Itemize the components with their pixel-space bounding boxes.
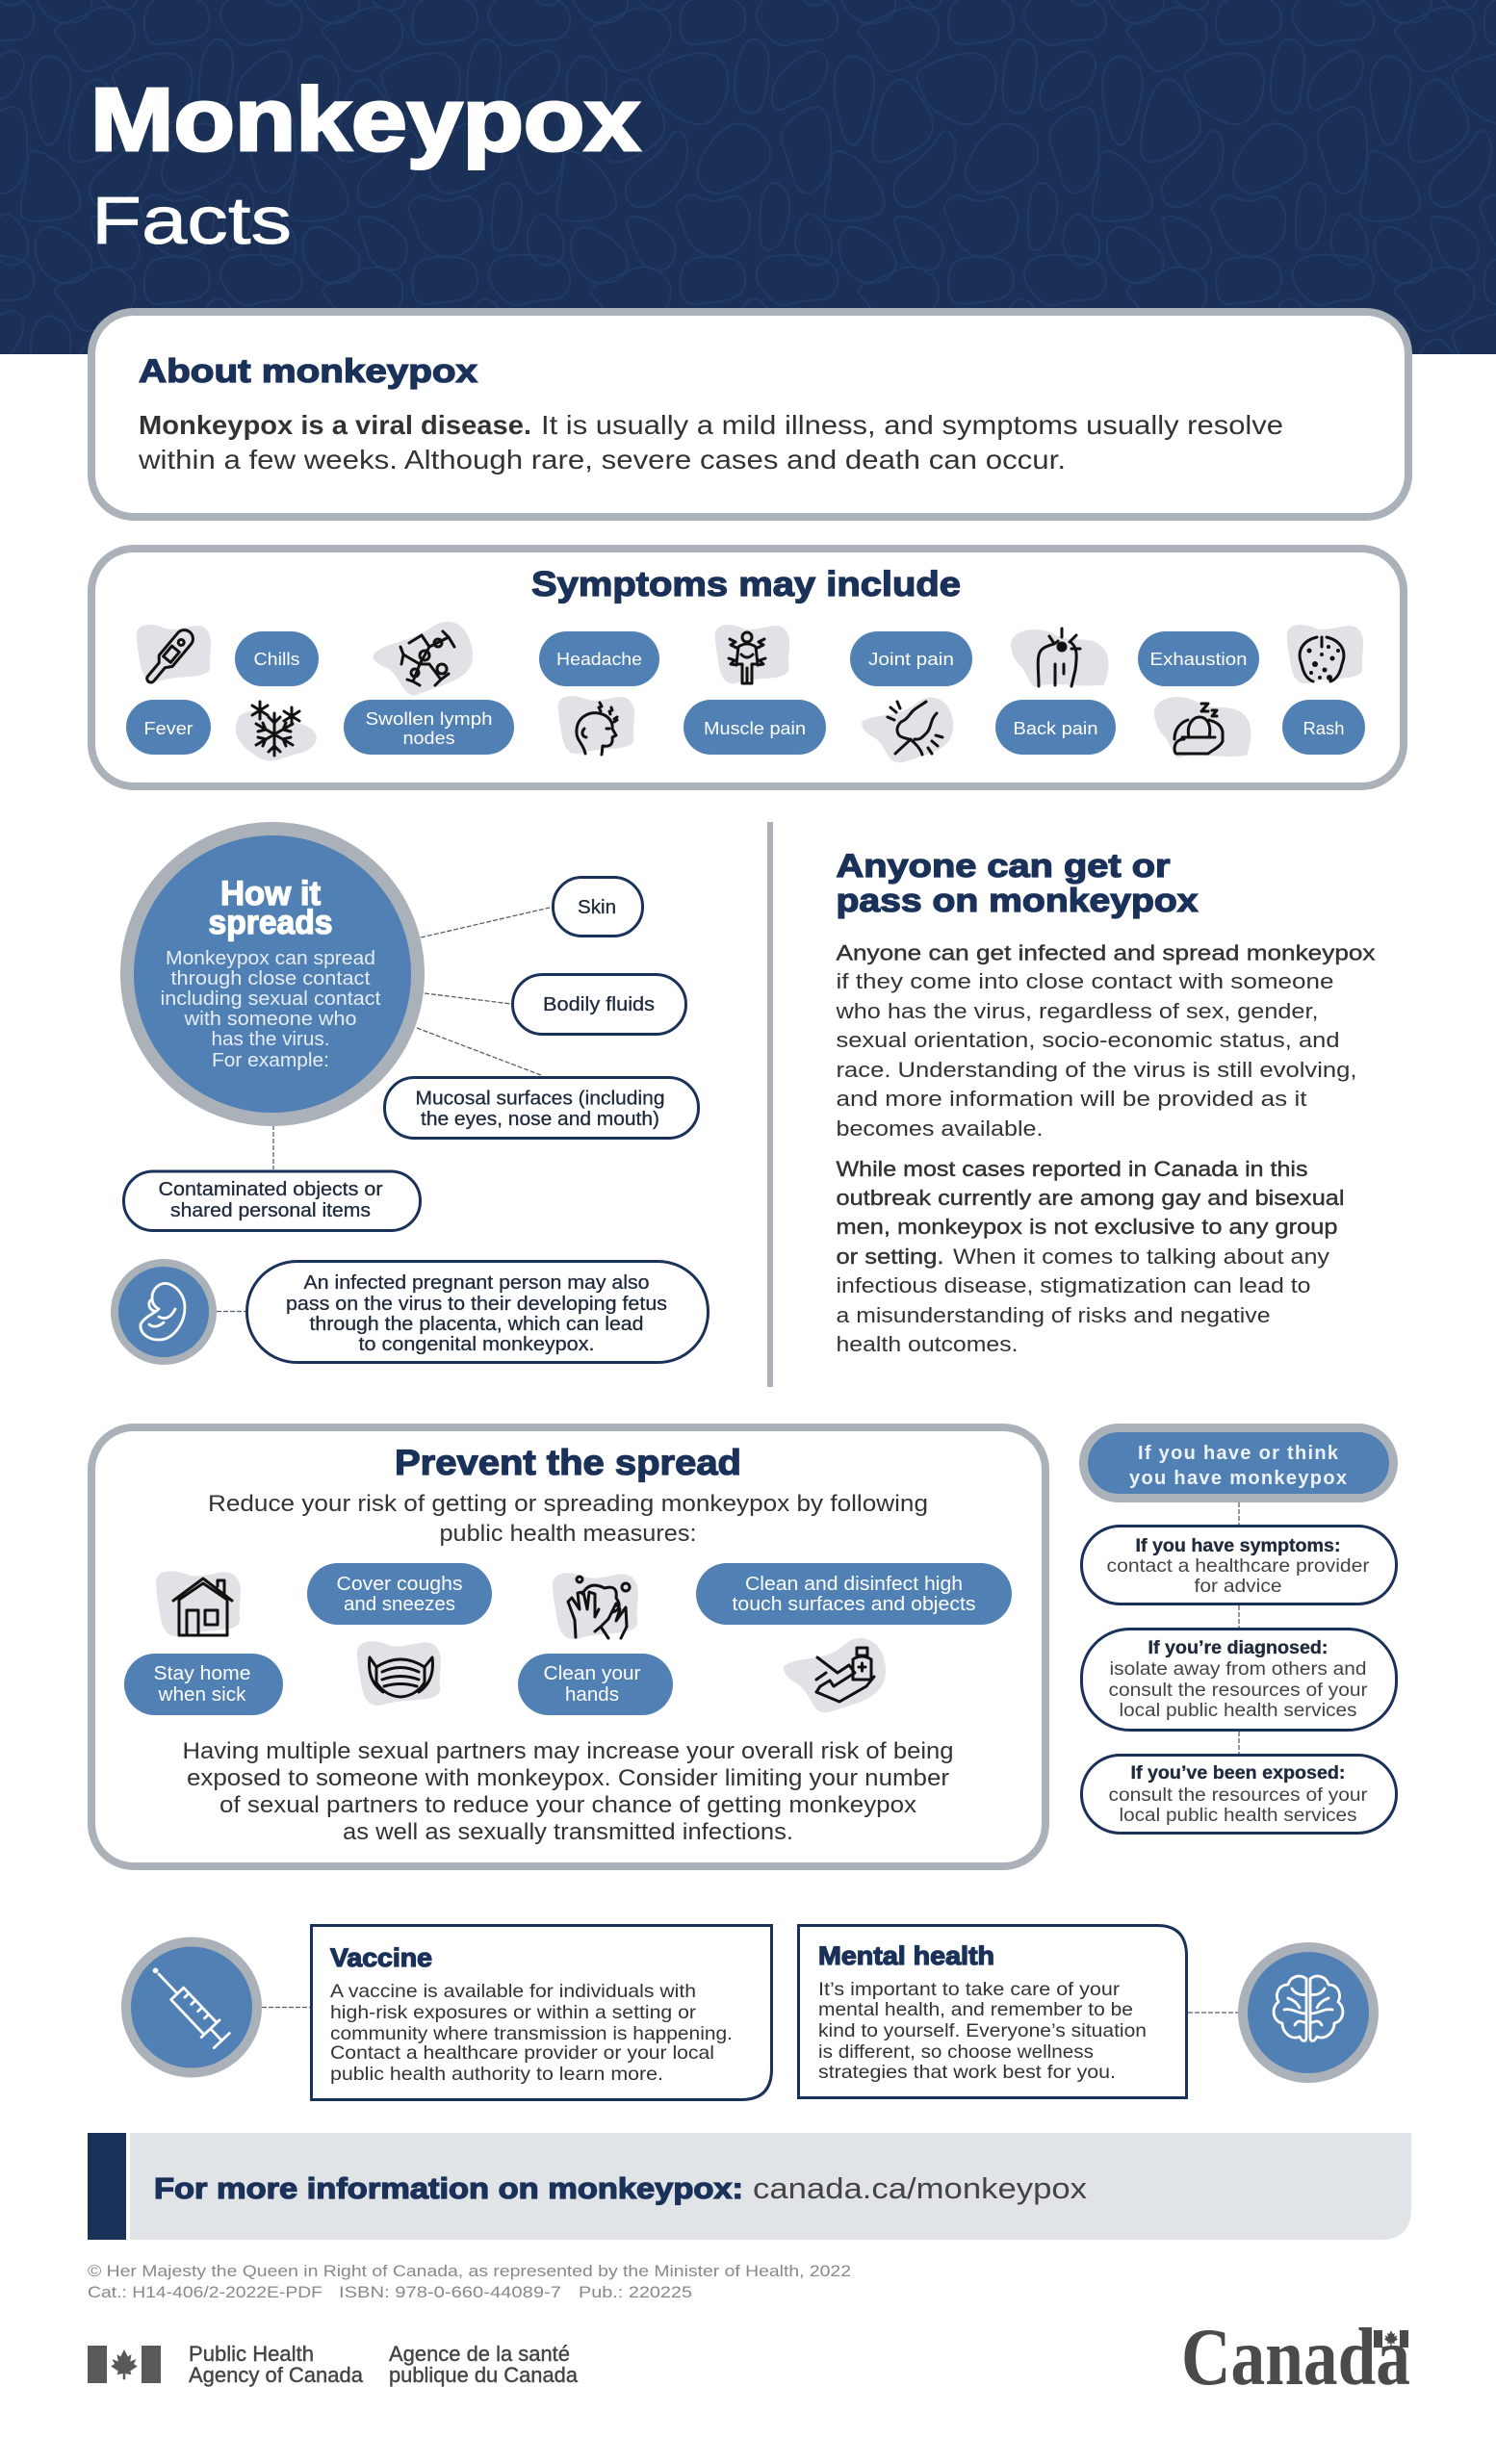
pill: cover coughs: Cover coughs: [337, 1574, 462, 1595]
symptom: fever label: [126, 700, 211, 755]
pill: if you're diagnosed: If you’re diagnosed:: [1148, 1638, 1328, 1658]
symptom: muscle pain label: Muscle pain: [704, 719, 806, 738]
vertical divider: [767, 822, 773, 1387]
pill: if you're diagnosed: [1082, 1629, 1396, 1731]
pill: if you're diagnosed: consult the resources of your: [1109, 1681, 1368, 1701]
flow: if you have monkeypox: [1082, 1428, 1396, 1833]
box: mental health: Mental health: [818, 1941, 994, 1970]
box: vaccine: A vaccine is available for individuals with: [330, 1981, 696, 2002]
pill: bodily fluids: [512, 974, 685, 1034]
banner: more information: For more information on monkeypox:: [154, 2171, 743, 2205]
box: vaccine: [312, 1925, 772, 2100]
pill: clean and disinfect: [696, 1563, 1012, 1625]
text: intro: Reduce your risk of getting or spreading monkeypox by following: [208, 1491, 928, 1517]
panel: prevent the spread: [91, 1427, 1045, 1866]
heading: anyone can get: [836, 848, 1199, 919]
page header band: [0, 0, 1496, 354]
box: mental health: mental health, and remember to be: [818, 1999, 1133, 2020]
icon: house: [156, 1571, 241, 1636]
icon: disinfecting surfaces: [784, 1638, 886, 1712]
logo: public health agency: Agency of Canada: [189, 2363, 364, 2387]
symptom: swollen lymph nodes label: [344, 700, 514, 755]
pill: if you have symptoms: If you have symptoms:: [1136, 1536, 1340, 1556]
text: copyright: Cat.: H14-406/2-2022E-PDF: [88, 2283, 322, 2301]
symptom: rash label: [1282, 700, 1365, 755]
heading: about monkeypox: About monkeypox: [139, 353, 477, 390]
pill: mucosal surfaces: Mucosal surfaces (including: [416, 1088, 664, 1109]
paragraph: anyone can get infected: who has the virus, regardless of sex, gender,: [835, 999, 1319, 1023]
pill: pregnant person: [246, 1261, 709, 1363]
pill: if you have symptoms: contact a healthcare provider: [1107, 1556, 1370, 1577]
logo: public health agency: [88, 2342, 579, 2387]
paragraph: while most cases: a misunderstanding of risks and negative: [836, 1303, 1271, 1327]
icon: washing hands: [553, 1573, 638, 1639]
text: copyright: Pub.: 220225: [579, 2283, 692, 2301]
box: vaccine: community where transmission is happening.: [330, 2023, 733, 2044]
symptom: chills label: [235, 631, 319, 686]
pill: heading: [1084, 1428, 1394, 1498]
paragraph: anyone can get infected: and more information will be provided as it: [836, 1087, 1307, 1111]
pill: mucosal surfaces: the eyes, nose and mouth): [421, 1109, 659, 1130]
subtitle: Facts: [91, 183, 292, 258]
pill: contaminated objects: shared personal items: [170, 1200, 371, 1221]
box: vaccine: public health authority to learn more.: [330, 2064, 663, 2085]
symptom: muscle pain icon: [715, 625, 789, 683]
pill: cover coughs: [307, 1563, 492, 1625]
paragraph: while most cases: men, monkeypox is not exclusive to any group: [836, 1215, 1338, 1239]
text block: anyone can get or pass on: [835, 848, 1375, 1356]
text: about description: It is usually a mild illness, and symptoms usually resolve: [541, 410, 1283, 440]
symptom: back pain label: [995, 700, 1116, 755]
circle: how it spreads: [127, 829, 418, 1119]
symptom: swollen lymph nodes icon: [373, 622, 473, 695]
text: about description: Monkeypox is a viral disease.: [139, 410, 531, 440]
pill: contaminated objects: [123, 1171, 420, 1230]
paragraph: anyone can get infected: becomes available.: [836, 1116, 1044, 1141]
banner: more information: [88, 2133, 1411, 2240]
text: sexual partners: as well as sexually transmitted infections.: [343, 1819, 793, 1845]
box: mental health: is different, so choose wellness: [818, 2041, 1094, 2063]
banner: more information: canada.ca/monkeypox: [753, 2171, 1088, 2205]
paragraph: anyone can get infected: Anyone can get infected and spread monkeypox: [836, 941, 1375, 964]
symptom: joint pain icon: [862, 698, 953, 762]
pill: bodily fluids: Bodily fluids: [543, 994, 655, 1015]
symptom: chills icon: [236, 702, 317, 760]
symptom: fever icon: [137, 625, 211, 687]
paragraph: anyone can get infected: sexual orientation, socio-economic status, and: [836, 1028, 1340, 1052]
icon: mask: [357, 1641, 441, 1706]
pill: stay home: [124, 1654, 283, 1715]
pill: if you're diagnosed: local public health services: [1119, 1701, 1357, 1721]
symptom: exhaustion label: [1138, 631, 1259, 686]
circle: how it spreads: through close contact: [171, 967, 371, 989]
text: about description: within a few weeks. Although rare, severe cases and death can occur.: [138, 445, 1066, 475]
box: mental health: It’s important to take care of your: [818, 1979, 1121, 2000]
symptom: fever label: Fever: [144, 719, 193, 738]
pill: clean your hands: [518, 1654, 673, 1715]
symptom: headache icon: [558, 696, 634, 755]
pill: if you have symptoms: [1082, 1527, 1396, 1604]
circle: how it spreads: has the virus.: [212, 1028, 329, 1050]
pill: pregnant person: pass on the virus to their developing fetus: [286, 1294, 667, 1315]
logo: canada wordmark: Canada: [1181, 2313, 1410, 2402]
circle: how it spreads: For example:: [212, 1049, 329, 1071]
box: vaccine: high-risk exposures or within a setting or: [330, 2002, 697, 2023]
pill: pregnant person: through the placenta, which can lead: [310, 1314, 643, 1335]
heading: prevent the spread: Prevent the spread: [395, 1443, 741, 1482]
pill: mucosal surfaces: [385, 1078, 699, 1138]
pill: skin: Skin: [578, 897, 616, 918]
symptom: back pain label: Back pain: [1013, 719, 1097, 738]
pill: stay home: when sick: [157, 1684, 247, 1706]
text: sexual partners: exposed to someone with monkeypox. Consider limiting your number: [187, 1765, 949, 1791]
panel: about monkeypox: [91, 312, 1408, 517]
paragraph: while most cases: outbreak currently are among gay and bisexual: [836, 1186, 1344, 1210]
connector lines: [217, 908, 550, 1311]
text: sexual partners: Having multiple sexual partners may increase your overall risk of being: [183, 1738, 953, 1764]
pill: skin: [553, 878, 643, 936]
symptom: headache label: [539, 631, 659, 686]
pill: stay home: Stay home: [154, 1663, 250, 1684]
symptom: exhaustion icon: [1154, 697, 1251, 757]
connector lines: [1238, 1502, 1240, 1754]
symptom: exhaustion label: Exhaustion: [1149, 650, 1248, 669]
paragraph: while most cases: infectious disease, stigmatization can lead to: [836, 1273, 1311, 1297]
pill: pregnant person: An infected pregnant person may also: [304, 1272, 649, 1294]
section: mental health: [799, 1925, 1374, 2098]
paragraph: while most cases: When it comes to talking about any: [953, 1245, 1329, 1269]
paragraph: anyone can get infected: [835, 941, 1375, 1141]
box: mental health: [799, 1925, 1186, 2098]
symptom: muscle pain label: [684, 700, 826, 755]
pill: if you've been exposed: consult the resources of your: [1109, 1785, 1368, 1806]
box: vaccine: Contact a healthcare provider or your local: [330, 2042, 714, 2064]
title: Monkeypox: [90, 69, 640, 169]
diagram: how it spreads: [115, 829, 709, 1363]
pill: clean your hands: Clean your: [543, 1663, 641, 1684]
circle: how it spreads: Monkeypox can spread: [166, 947, 375, 969]
symptom: chills label: Chills: [254, 650, 300, 669]
box: vaccine: Vaccine: [330, 1943, 432, 1972]
symptom: rash icon: [1287, 625, 1363, 683]
pill: if you're diagnosed: isolate away from others and: [1109, 1659, 1367, 1680]
symptom: joint pain label: Joint pain: [868, 650, 954, 669]
logo: public health agency: Agence de la santé: [389, 2342, 570, 2366]
text: copyright: ISBN: 978-0-660-44089-7: [339, 2283, 561, 2301]
pill: if you've been exposed: local public health services: [1119, 1806, 1357, 1826]
paragraph: while most cases: health outcomes.: [836, 1332, 1019, 1356]
heading: anyone can get: Anyone can get or: [836, 848, 1171, 885]
pill: if you have symptoms: for advice: [1194, 1577, 1282, 1597]
pill: heading: you have monkeypox: [1129, 1468, 1347, 1489]
icon: fetus: [115, 1263, 213, 1361]
heading: symptoms: Symptoms may include: [531, 564, 961, 603]
logo: public health agency: Public Health: [189, 2342, 314, 2366]
pill: clean your hands: hands: [565, 1684, 619, 1706]
symptom: headache label: Headache: [556, 650, 642, 669]
icon: brain: [1243, 1947, 1374, 2078]
symptom: rash label: Rash: [1303, 719, 1344, 738]
text: about description: [138, 410, 1283, 475]
text: copyright: [88, 2262, 851, 2301]
circle: how it spreads: including sexual contact: [160, 988, 381, 1010]
pill: clean and disinfect: Clean and disinfect high: [745, 1574, 963, 1595]
symptom: swollen lymph nodes label: Swollen lymph: [366, 709, 493, 729]
paragraph: anyone can get infected: race. Understanding of the virus is still evolving,: [836, 1058, 1357, 1082]
heading: anyone can get: pass on monkeypox: [836, 883, 1199, 919]
pill: heading: If you have or think: [1138, 1443, 1339, 1464]
section: vaccine: [126, 1925, 772, 2100]
pill: cover coughs: and sneezes: [344, 1594, 455, 1615]
paragraph: while most cases: While most cases reported in Canada in this: [836, 1157, 1307, 1181]
box: mental health: kind to yourself. Everyone’s situation: [818, 2020, 1147, 2041]
box: mental health: strategies that work best for you.: [818, 2062, 1116, 2083]
pill: clean and disinfect: touch surfaces and objects: [732, 1594, 976, 1615]
text: intro: public health measures:: [439, 1521, 697, 1547]
text: sexual partners: of sexual partners to reduce your chance of getting monkeypox: [219, 1792, 916, 1818]
text: intro: [208, 1491, 928, 1547]
symptom: swollen lymph nodes label: nodes: [402, 729, 454, 748]
symptom: joint pain label: [850, 631, 972, 686]
logo: public health agency: publique du Canada: [389, 2363, 579, 2387]
pill: if you've been exposed: If you’ve been exposed:: [1130, 1763, 1346, 1784]
paragraph: while most cases: [836, 1157, 1344, 1356]
circle: how it spreads: How it: [220, 875, 321, 912]
panel: symptoms: [91, 549, 1404, 786]
text: copyright: © Her Majesty the Queen in Right of Canada, as represented by the Minister of Health, 2022: [88, 2262, 851, 2280]
symptom: back pain icon: [1011, 629, 1108, 687]
circle: how it spreads: with someone who: [183, 1008, 356, 1030]
pill: pregnant person: to congenital monkeypox.: [358, 1334, 595, 1355]
paragraph: while most cases: or setting.: [836, 1245, 943, 1269]
circle: how it spreads: spreads: [208, 904, 333, 941]
pill: contaminated objects: Contaminated objects or: [158, 1179, 383, 1200]
icon: syringe: [126, 1942, 257, 2073]
paragraph: anyone can get infected: if they come into close contact with someone: [836, 969, 1334, 993]
pill: if you've been exposed: [1082, 1756, 1396, 1833]
icon: flag: [88, 2346, 161, 2383]
text: sexual partners: [183, 1738, 953, 1845]
